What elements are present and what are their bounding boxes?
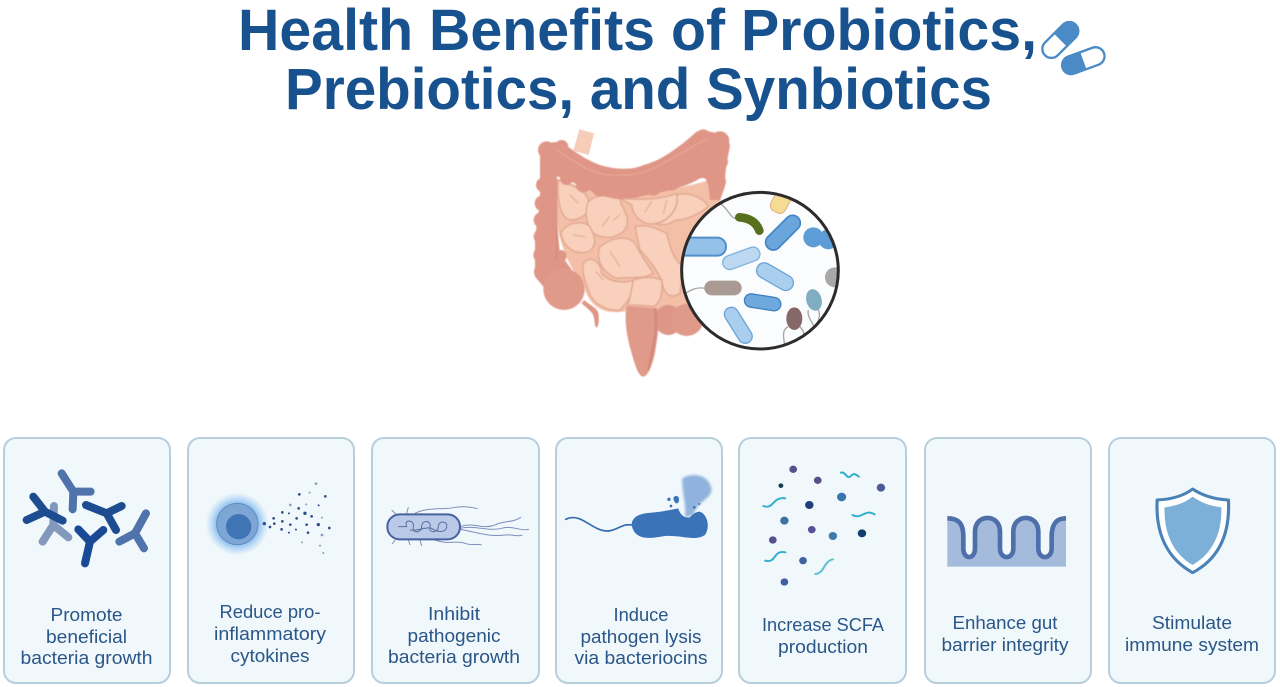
panel: reduce pro-inflammatory cytokines xyxy=(188,438,354,683)
label: Enhance gut xyxy=(952,612,1058,633)
label xyxy=(574,604,708,668)
label: beneficial xyxy=(46,626,127,647)
small intestine xyxy=(553,177,722,312)
icon: intestinal villi barrier xyxy=(947,518,1066,567)
label: pathogen lysis xyxy=(580,626,702,647)
label: Reduce pro- xyxy=(220,601,320,622)
label: immune system xyxy=(1125,634,1259,655)
panel: induce pathogen lysis via bacteriocins xyxy=(556,438,722,683)
label: Stimulate xyxy=(1152,612,1232,633)
label: Induce xyxy=(614,604,668,625)
label: pathogenic xyxy=(408,625,500,646)
icon: cell releasing cytokines xyxy=(206,482,331,556)
panel: promote beneficial bacteria growth xyxy=(4,438,170,683)
label: Promote xyxy=(50,604,122,625)
label xyxy=(762,614,885,657)
icon: capsules xyxy=(1038,17,1107,78)
icon: bacteria cluster xyxy=(27,473,146,563)
panel: inhibit pathogenic bacteria growth xyxy=(372,438,539,683)
label xyxy=(20,604,152,668)
label: bacteria growth xyxy=(20,647,152,668)
label: Increase SCFA xyxy=(762,614,885,635)
panel: increase SCFA production xyxy=(739,438,906,683)
magnified microbiome circle xyxy=(677,184,845,349)
title xyxy=(238,0,1037,122)
label: cytokines xyxy=(230,645,310,666)
label: inflammatory xyxy=(214,623,327,644)
icon: short chain fatty acid molecules xyxy=(763,466,885,586)
icon: shield xyxy=(1157,489,1229,573)
label xyxy=(214,601,327,666)
label: bacteria growth xyxy=(388,646,520,667)
label: Inhibit xyxy=(428,603,480,624)
panel: enhance gut barrier integrity xyxy=(925,438,1091,683)
icon: rod bacterium with flagella xyxy=(387,507,529,546)
panel: stimulate immune system xyxy=(1109,438,1275,683)
label: via bacteriocins xyxy=(574,647,708,668)
label xyxy=(1125,612,1259,655)
label xyxy=(942,612,1069,655)
label: production xyxy=(778,636,868,657)
label: barrier integrity xyxy=(942,634,1069,655)
label xyxy=(388,603,520,667)
esophagus xyxy=(573,129,594,155)
icon: lysing bacterium xyxy=(566,475,712,538)
colon xyxy=(533,129,730,377)
illustration: intestines with microbiome magnifier xyxy=(533,129,845,377)
title: Prebiotics, and Synbiotics xyxy=(285,57,992,122)
